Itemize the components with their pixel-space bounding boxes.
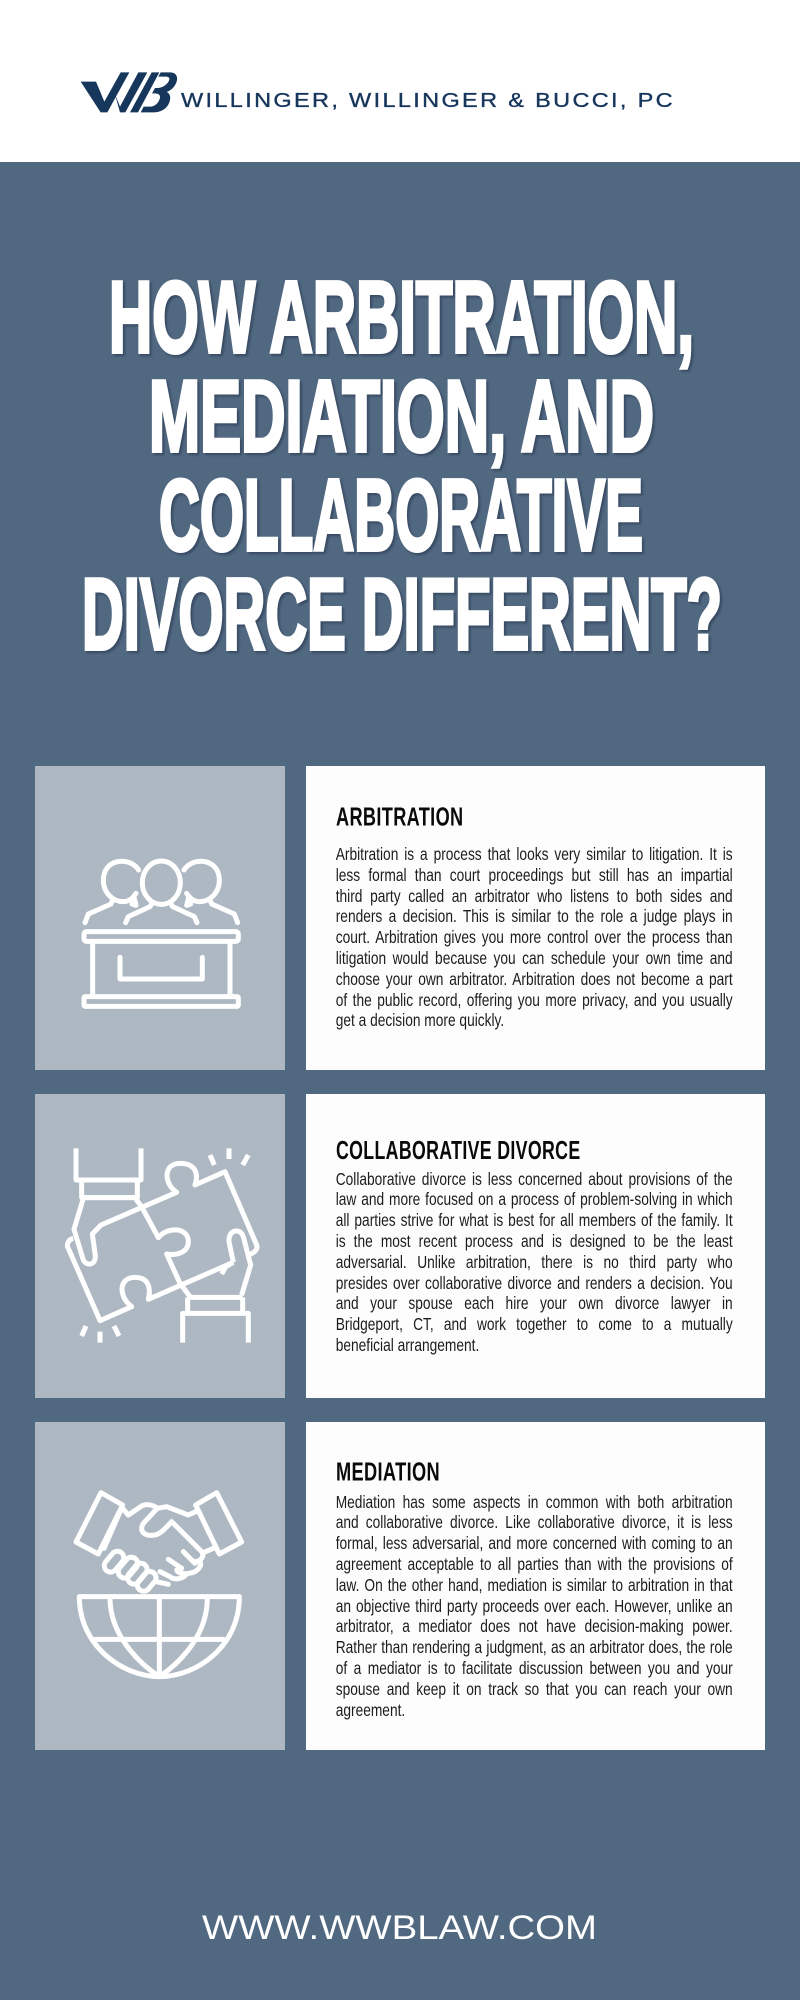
section: mediation	[35, 1422, 765, 1750]
title	[82, 261, 722, 671]
title: MEDIATION, AND	[149, 360, 654, 473]
text block: collaborative divorce: adversarial. Unlike arbitration, there is no third party who	[336, 1252, 732, 1272]
panel: mediation text	[306, 1422, 765, 1750]
text block: collaborative divorce: Collaborative divorce is less concerned about provisions of the	[336, 1169, 732, 1189]
text block: mediation: formal, less adversarial, and more concerned with coming to an	[336, 1533, 732, 1553]
section: arbitration	[35, 766, 765, 1070]
text block: arbitration: court. Arbitration gives you more control over the process than	[336, 927, 732, 947]
text block: arbitration: less formal than court proceedings but still has an impartial	[336, 865, 732, 885]
text block: collaborative divorce: is the most recent process and is designed to be the least	[336, 1231, 732, 1251]
text block: mediation: and collaborative divorce. Like collaborative divorce, it is less	[336, 1512, 732, 1532]
text block: arbitration: third party called an arbitrator who listens to both sides and	[336, 886, 732, 906]
text block: mediation: an objective third party proceeds over each. However, unlike an	[336, 1596, 732, 1616]
header band with logo	[0, 0, 800, 162]
text block: collaborative divorce: law and more focused on a process of problem-solving in which	[336, 1189, 732, 1209]
heading: mediation: MEDIATION	[336, 1457, 440, 1487]
text block: mediation: of a mediator is to facilitate discussion between you and your	[336, 1658, 732, 1678]
text block: arbitration: get a decision more quickly.	[336, 1010, 504, 1030]
heading: arbitration: ARBITRATION	[336, 802, 463, 832]
panel: mediation icon	[35, 1422, 285, 1750]
text block: collaborative divorce: Bridgeport, CT, and work together to come to a mutually	[336, 1314, 732, 1334]
logo: firm name: WILLINGER, WILLINGER & BUCCI, PC	[181, 90, 675, 112]
text block: mediation: Rather than rendering a judgment, as an arbitrator does, the role	[336, 1637, 732, 1657]
panel: arbitration text	[306, 766, 765, 1070]
icon: two hands joining puzzle pieces	[64, 1148, 260, 1343]
text block: arbitration: of the public record, offering you more privacy, and you usually	[336, 990, 732, 1010]
icon: handshake above a globe	[74, 1490, 244, 1680]
text block: arbitration: Arbitration is a process that looks very similar to litigation. It is	[336, 844, 732, 864]
text block: arbitration: litigation would because you can schedule your own time and	[336, 948, 732, 968]
text block: collaborative divorce: all parties strive for what is best for all members of the family. It	[336, 1210, 732, 1230]
title: DIVORCE DIFFERENT?	[82, 558, 722, 671]
icon: panel of three people behind a bench	[82, 858, 241, 1009]
text block: mediation	[336, 1492, 733, 1720]
text block: arbitration	[336, 844, 733, 1030]
heading: collaborative divorce: COLLABORATIVE DIVORCE	[336, 1135, 580, 1165]
text block: mediation: Mediation has some aspects in common with both arbitration	[336, 1492, 732, 1512]
panel: collaborative divorce text	[306, 1094, 765, 1398]
text block: collaborative divorce: presides over collaborative divorce and renders a decision. You	[336, 1273, 732, 1293]
text block: mediation: agreement acceptable to all parties than with the provisions of	[336, 1554, 732, 1574]
logo: WB monogram	[80, 72, 178, 112]
text block: mediation: arbitrator, a mediator does not have decision-making power.	[336, 1616, 732, 1636]
footer website: WWW.WWBLAW.COM	[202, 1909, 597, 1947]
section: collaborative divorce	[35, 1094, 765, 1398]
text block: collaborative divorce: beneficial arrangement.	[336, 1335, 479, 1355]
panel: arbitration icon	[35, 766, 285, 1070]
title: COLLABORATIVE	[159, 459, 643, 572]
text block: mediation: law. On the other hand, mediation is similar to arbitration in that	[336, 1575, 732, 1595]
title: HOW ARBITRATION,	[109, 261, 694, 374]
text block: arbitration: choose your own arbitrator. Arbitration does not become a part	[336, 969, 732, 989]
text block: mediation: spouse and keep it on track so that you can reach your own	[336, 1679, 732, 1699]
text block: collaborative divorce: and your spouse each hire your own divorce lawyer in	[336, 1293, 732, 1313]
panel: collaborative divorce icon	[35, 1094, 285, 1398]
text block: collaborative divorce	[336, 1169, 733, 1355]
text block: arbitration: renders a decision. This is similar to the role a judge plays in	[336, 906, 732, 926]
text block: mediation: agreement.	[336, 1700, 405, 1720]
